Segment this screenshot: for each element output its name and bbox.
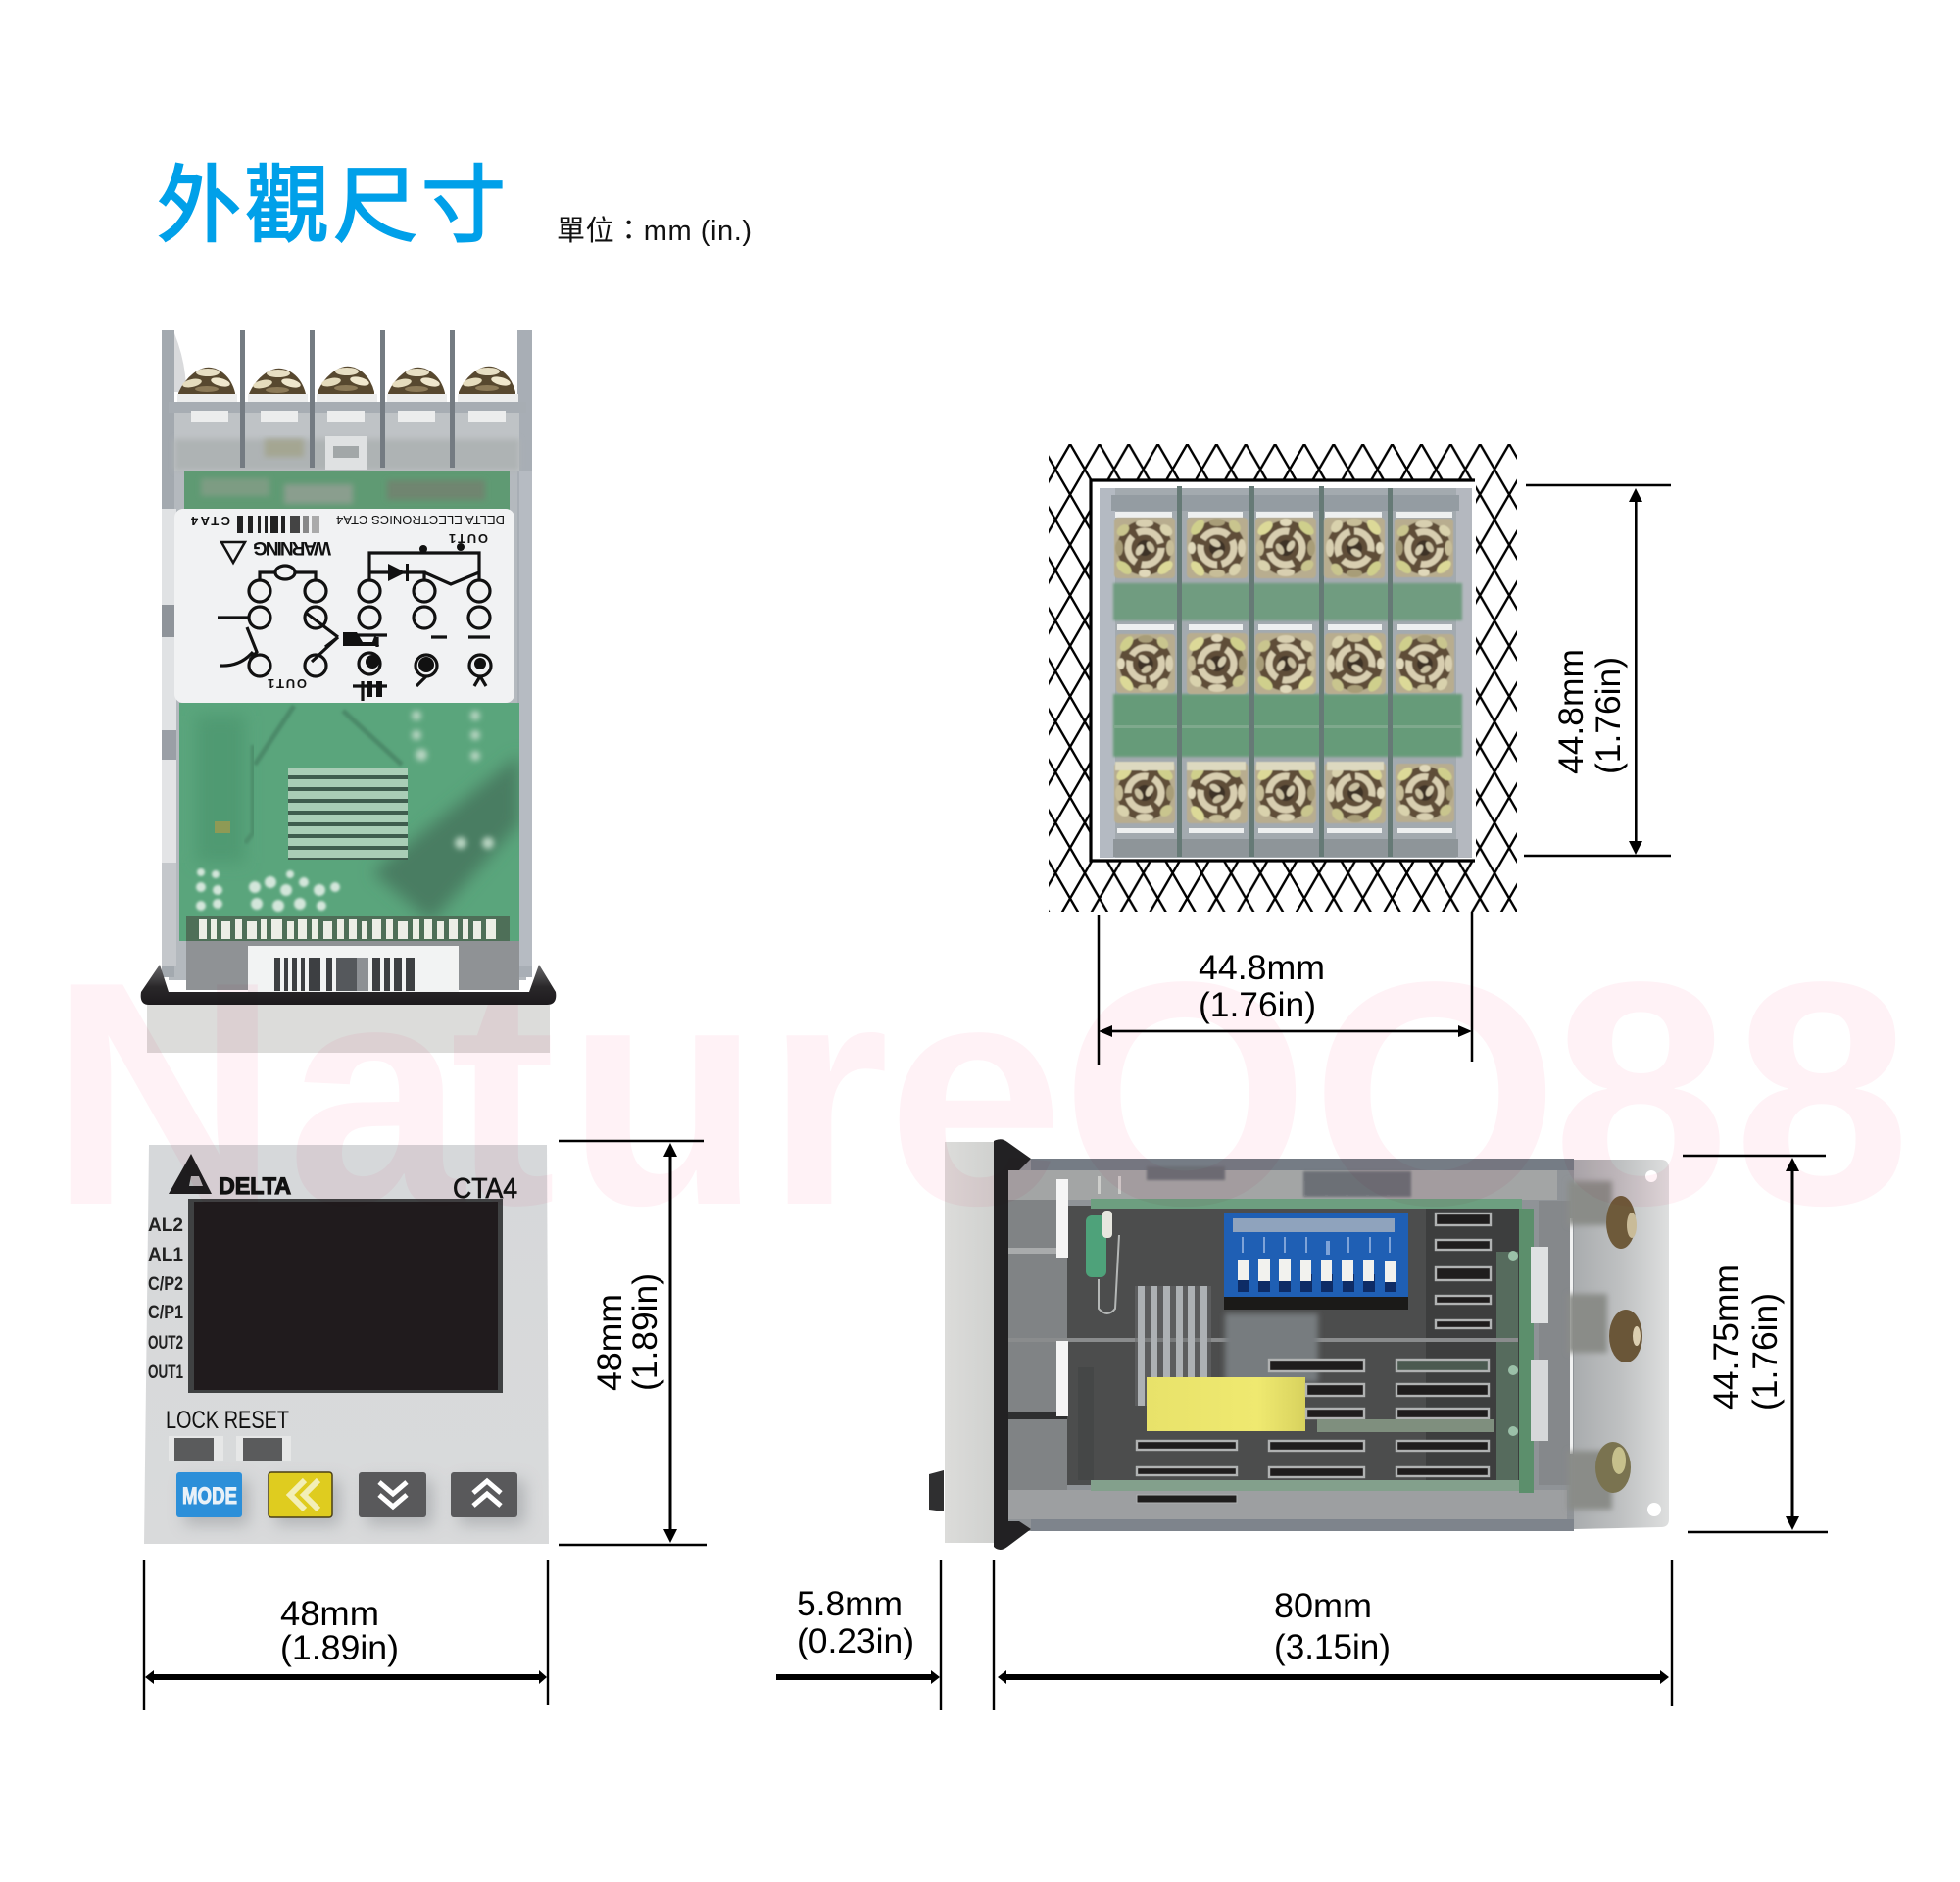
arrow [1099,1025,1472,1037]
thick arrow [998,1670,1669,1684]
connector comb [186,916,510,945]
model name: CTA4 [453,1173,517,1205]
delta logo: DELTA [219,1173,291,1200]
arrow [1629,488,1642,855]
column dividers [1177,486,1393,857]
black flange [994,1139,1031,1550]
watermark: NatureOO88 [49,916,1911,1271]
panel: rear view device [141,330,556,1053]
terminal block body [1100,488,1472,858]
indicator labels [148,1215,183,1383]
unit note: 單位：mm (in.) [557,215,752,247]
white strips [1115,512,1452,833]
rear device body [162,330,532,980]
side bezel [945,1142,994,1543]
reset button [236,1436,291,1461]
extension lines [1099,912,1472,1065]
extension lines [994,1560,1672,1710]
dip switch [1224,1213,1408,1310]
label: 44.8mm [1199,949,1325,987]
indicator labels: OUT1 [148,1362,183,1383]
side screws [1568,1181,1642,1510]
label: 48mm [280,1595,379,1633]
down button [359,1472,426,1517]
label: 44.8mm [1552,649,1591,774]
barcode on label [237,516,319,533]
heatsink lines [1135,1286,1211,1406]
label upside-down print [190,513,505,691]
panel: panel cutout with hatch [1049,444,1517,912]
extension lines [144,1560,548,1710]
label: 80mm [1274,1587,1372,1625]
diode and blobs [343,543,486,697]
label: (0.23in) [797,1622,914,1660]
extension lines [1683,1156,1828,1532]
dimension: side height [1683,1156,1828,1532]
dimension: cutout height [1524,485,1671,856]
white slits [1056,1179,1068,1416]
label: 48mm [591,1294,629,1391]
lock button [169,1436,223,1461]
terminal dividers [240,330,455,468]
left button [269,1472,332,1517]
chip on rear pcb [288,768,408,860]
label [797,1585,914,1660]
label [280,1595,399,1667]
label upside-down print: OUT1 [449,531,488,546]
pcb top strip [184,470,510,510]
title: 外觀尺寸 [157,136,510,259]
knob [929,1470,944,1511]
dimension: front width [144,1560,548,1710]
label [591,1273,664,1391]
label upside-down print: DELTA ELECTRONICS CTA4 [336,513,505,527]
lock reset text: LOCK RESET [166,1407,289,1434]
label: (1.89in) [280,1629,399,1667]
indicator labels: C/P1 [148,1303,183,1323]
screw row 2 [1116,633,1454,694]
label: (1.89in) [626,1273,664,1391]
label: (1.76in) [1746,1293,1785,1411]
arrow [663,1143,677,1543]
terminal screws [177,367,518,422]
mode button: MODE [182,1483,237,1510]
yellow capacitor [1147,1377,1305,1431]
label: 44.75mm [1707,1264,1745,1410]
hatching [1049,444,1517,912]
mode button [176,1472,242,1517]
label: 5.8mm [797,1585,903,1623]
delta logo [169,1154,291,1200]
thick arrow [145,1670,547,1684]
panel: side view [929,1139,1669,1550]
dimension: bezel depth [776,1560,941,1710]
green trace bar [1317,1419,1494,1432]
barcode sticker [186,941,519,992]
side body [1008,1159,1574,1531]
display screen [188,1199,503,1393]
button shadows [184,1480,525,1525]
label [1274,1587,1391,1666]
indicator labels: AL1 [148,1245,183,1265]
pcb lower board [179,703,519,941]
label upside-down print: CTA4 [190,514,230,528]
label: (3.15in) [1274,1628,1391,1666]
indicator labels: OUT2 [148,1333,183,1354]
indicator labels: AL2 [148,1215,183,1236]
front bezel block [147,1005,550,1053]
cutout outline [1091,480,1475,861]
label [1199,949,1325,1024]
thick arrow [776,1670,940,1684]
extension line [940,1560,942,1710]
screw row 1 [1114,518,1453,578]
panel: front view [144,1145,549,1544]
wiring diagram [218,542,491,701]
extension lines [1524,485,1671,856]
label [1552,649,1628,774]
front face [144,1145,549,1544]
dimension: cutout width [1099,912,1472,1065]
label: (1.76in) [1199,986,1316,1024]
screw row 3 [1114,762,1454,823]
label upside-down print: OUT1 [268,676,307,691]
rear wiring label [174,509,514,703]
arrow [1786,1158,1799,1530]
extension lines [559,1141,707,1545]
label [1707,1264,1785,1411]
indicator labels: C/P2 [148,1274,183,1295]
pcb edges [1086,1199,1534,1493]
up button [451,1472,517,1517]
label: (1.76in) [1590,657,1628,774]
terminal end plate [1531,1160,1669,1529]
label upside-down print: WARNING [253,537,331,558]
slot openings [1137,1213,1491,1503]
black flange [141,965,556,1005]
dimension: front height [559,1141,707,1545]
dimension: side length [994,1560,1672,1710]
